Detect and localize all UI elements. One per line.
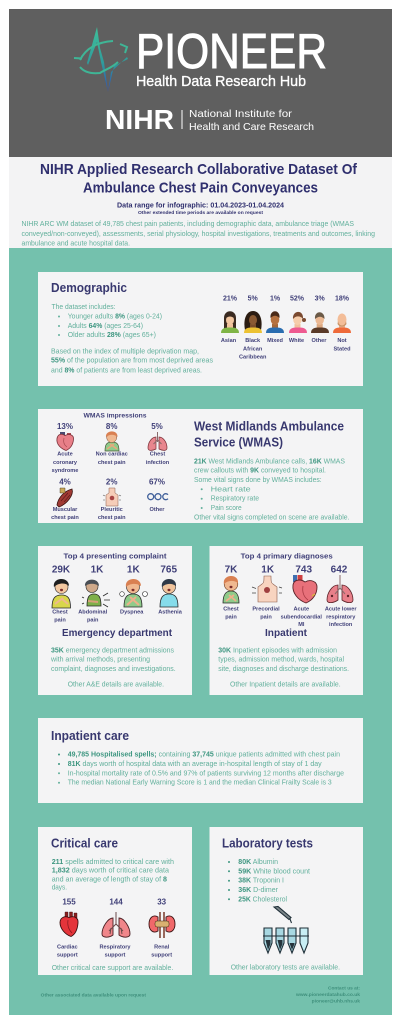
complaint: chest pain: Chest <box>52 609 68 615</box>
NIHR logo: NIHR <box>105 104 174 135</box>
heading: West Midlands Ambulance Service: Service (WMAS) <box>194 436 283 450</box>
support: cardiac: support <box>57 953 78 959</box>
diagnosis: chest pain: Chest <box>223 606 239 612</box>
ethnicity: Asian: 21% <box>223 296 238 303</box>
deprivation text: 55% of the population are from most deprived areas <box>51 356 213 365</box>
critical care text: 211 spells admitted to critical care with <box>52 857 174 866</box>
impression: pleuritic chest pain: chest pain <box>98 515 126 521</box>
ethnicity: Black African Caribbean: Caribbean <box>239 354 267 360</box>
intro text <box>22 219 375 248</box>
diagnosis: acute lower respiratory infection: 642 <box>331 564 348 575</box>
impression: pleuritic chest pain <box>98 478 126 521</box>
ethnicity: Other: Other <box>312 338 327 344</box>
impression: muscular chest pain: chest pain <box>51 515 79 521</box>
panel: demographic <box>38 272 363 386</box>
ethnicity: Not Stated: 18% <box>335 296 350 303</box>
diagnosis: acute subendocardial MI <box>281 564 322 628</box>
data range: Other extended time periods are available on request <box>138 210 264 215</box>
impression: non cardiac chest pain: Non cardiac <box>96 452 128 458</box>
inpatient body text: Other Inpatient details are available. <box>230 680 341 689</box>
impression: acute coronary syndrome <box>52 422 78 474</box>
title: Ambulance Chest Pain Conveyances <box>83 180 318 196</box>
ethnicity: Not Stated: Not <box>337 338 347 344</box>
ethnicity: White: White <box>289 338 304 344</box>
complaint: chest pain: pain <box>54 617 66 623</box>
support: renal: 33 <box>157 898 167 907</box>
diagnosis: acute subendocardial MI: subendocardial <box>281 614 322 620</box>
intro panel <box>9 157 392 248</box>
support: respiratory: support <box>105 953 126 959</box>
inpatient care bullets <box>58 750 344 787</box>
inpatient care bullets: 49,785 Hospitalised spells; containing 37,745 unique patients admitted with chest pain <box>68 750 340 759</box>
ethnicity: Other <box>311 296 329 344</box>
data range <box>117 202 284 215</box>
complaint: abdominal pain: pain <box>87 617 99 623</box>
lab test list <box>228 857 310 903</box>
inpatient care bullets: The median National Early Warning Score is 1 and the median Clinical Frailty Scale is 3 <box>68 778 332 787</box>
ethnicity: Black African Caribbean: African <box>243 346 263 352</box>
support: respiratory: Respiratory <box>99 945 131 951</box>
support: cardiac: 155 <box>62 898 76 907</box>
complaint: dyspnea: 1K <box>127 564 140 575</box>
ED body text: 35K emergency department admissions <box>51 645 174 654</box>
diagnosis: chest pain: pain <box>225 614 237 620</box>
ethnicity: White: 52% <box>290 296 305 303</box>
ethnicity: White <box>289 296 307 344</box>
age breakdown text <box>52 302 162 339</box>
complaint: chest pain <box>52 564 71 623</box>
lab test list: 80K Albumin <box>238 857 278 866</box>
inpatient body text: types, admission method, wards, hospital <box>218 655 344 664</box>
impression: other: 67% <box>149 478 165 487</box>
ED body text <box>50 645 176 689</box>
impression: chest infection: Chest <box>150 452 165 458</box>
NIHR logo: Health and Care Research <box>189 121 314 133</box>
ethnicity: Black African Caribbean <box>239 296 267 360</box>
complaint: abdominal pain <box>78 564 110 623</box>
impression: acute coronary syndrome: 13% <box>57 422 73 431</box>
diagnosis: acute lower respiratory infection: Acute lower <box>325 606 357 612</box>
panel: inpatient care <box>38 718 363 803</box>
impression: pleuritic chest pain: Pleuritic <box>101 507 123 513</box>
diagnosis: precordial pain: Precordial <box>252 606 280 612</box>
impression: acute coronary syndrome: coronary <box>53 460 78 466</box>
WMAS body text: Pain score <box>211 503 242 512</box>
impression: muscular chest pain <box>51 478 79 521</box>
age breakdown text: Older adults 28% (ages 65+) <box>68 330 156 339</box>
complaint: abdominal pain: 1K <box>91 564 104 575</box>
support: cardiac <box>57 898 78 959</box>
diagnosis: precordial pain: pain <box>260 614 272 620</box>
heading: inpatient care: Inpatient care <box>51 729 129 743</box>
support: respiratory: 144 <box>109 898 123 907</box>
ethnicity: Mixed <box>266 296 284 344</box>
diagnosis: acute subendocardial MI: Acute <box>294 606 309 612</box>
support: renal <box>149 898 175 959</box>
impression: non cardiac chest pain: chest pain <box>98 460 126 466</box>
inpatient care bullets: In-hospital mortality rate of 0.5% and 97% of patients surviving 12 months after discharge <box>68 768 344 777</box>
deprivation text: Based on the index of multiple deprivation map, <box>51 346 199 355</box>
critical care text <box>52 857 174 892</box>
critical care text: days. <box>52 883 67 892</box>
intro text: ambulance and acute hospital data. <box>22 238 130 248</box>
diagnosis: acute lower respiratory infection <box>325 564 357 628</box>
panel: WMAS <box>38 409 363 523</box>
diagnosis: chest pain: 7K <box>225 564 238 575</box>
diagnosis: precordial pain <box>252 564 282 620</box>
top 4 complaint heading: Top 4 presenting complaint <box>64 551 167 560</box>
WMAS body text: 21K West Midlands Ambulance calls, 16K WMAS <box>194 456 345 465</box>
support: renal: support <box>151 953 172 959</box>
hub subtitle: Health Data Research Hub <box>136 73 306 90</box>
diagnosis: precordial pain: 1K <box>261 564 275 575</box>
lab test list: 59K White blood count <box>238 866 310 875</box>
impression: other <box>148 478 168 513</box>
complaint: asthenia: Asthenia <box>158 609 183 615</box>
impression: acute coronary syndrome: syndrome <box>52 468 78 474</box>
data range: Data range for infographic: 01.04.2023-01.04.2024 <box>117 202 284 210</box>
WMAS body text: Some vital signs done by WMAS includes: <box>194 475 322 484</box>
complaint: abdominal pain: Abdominal <box>78 609 108 615</box>
intro text: conveyed/non-conveyed), assessments, serial physiology, hospital investigations, treatments and outcomes, linking <box>22 229 375 238</box>
impression: other: Other <box>150 507 165 513</box>
ED body text: complaint, diagnoses and investigations. <box>51 664 176 673</box>
ethnicity: Black African Caribbean: 5% <box>248 296 259 303</box>
deprivation text: and 8% of patients are from least deprived areas. <box>51 365 202 374</box>
PIONEER wordmark: PIONEER <box>136 25 327 79</box>
intro text: NIHR ARC WM dataset of 49,785 chest pain patients, including demographic data, ambulance triage (WMAS <box>22 219 354 228</box>
lab note: Other laboratory tests are available. <box>231 963 340 972</box>
header banner <box>9 9 392 157</box>
panel: inpatient <box>210 546 363 695</box>
impression: chest infection: infection <box>146 460 170 466</box>
diagnosis: acute lower respiratory infection: infection <box>329 622 353 628</box>
ethnicity: Not Stated <box>333 296 351 352</box>
age breakdown text: Adults 64% (ages 25-64) <box>68 321 143 330</box>
heading: critical care: Critical care <box>51 837 118 851</box>
contact details: pioneer@uhb.nhs.uk <box>312 998 361 1003</box>
inpatient body text: 30K Inpatient episodes with admission <box>218 645 337 654</box>
critical care text: and an average of length of stay of 8 <box>52 874 167 883</box>
heading: demographic: Demographic <box>51 281 127 295</box>
WMAS body text: Respiratory rate <box>211 494 259 503</box>
inpatient body text <box>218 645 349 689</box>
critical care text: 1,832 days worth of critical care data <box>52 866 170 875</box>
NIHR logo: National Institute for <box>189 108 293 120</box>
panel: laboratory tests <box>210 827 363 975</box>
diagnosis: acute subendocardial MI: 743 <box>295 564 312 575</box>
footer note: Other associated data available upon request <box>41 993 147 998</box>
impression: non cardiac chest pain <box>96 422 128 466</box>
complaint: asthenia: 765 <box>160 564 177 575</box>
complaint: dyspnea: Dyspnea <box>120 609 144 615</box>
heading: West Midlands Ambulance Service: West Midlands Ambulance <box>194 420 344 434</box>
ethnicity: Black African Caribbean: Black <box>245 338 261 344</box>
WMAS body text: Other vital signs completed on scene are available. <box>194 512 350 521</box>
panel: emergency department <box>38 546 192 695</box>
title <box>40 161 358 196</box>
impression: muscular chest pain: 4% <box>59 478 71 487</box>
diagnosis: acute subendocardial MI: MI <box>298 622 305 628</box>
contact details <box>295 985 361 1003</box>
support: renal: Renal <box>154 945 170 951</box>
complaint: dyspnea <box>120 564 148 615</box>
deprivation text <box>51 346 213 374</box>
complaint: chest pain: 29K <box>52 564 71 575</box>
WMAS body text <box>194 456 350 521</box>
ethnicity: Not Stated: Stated <box>333 346 351 352</box>
impression: pleuritic chest pain: 2% <box>106 478 117 487</box>
lab test list: 36K D-dimer <box>238 885 279 894</box>
icon: Pioneer logo <box>74 27 128 92</box>
diagnosis: chest pain <box>223 564 239 620</box>
inpatient care bullets: 81K days worth of hospital data with an average in-hospital length of stay of 1 day <box>68 759 322 768</box>
heading: emergency department: Emergency department <box>62 627 172 639</box>
impression: acute coronary syndrome: Acute <box>57 452 73 458</box>
diagnosis: acute lower respiratory infection: respiratory <box>326 614 356 620</box>
WMAS body text: crew callouts with 9K conveyed to hospital. <box>194 466 326 475</box>
age breakdown text: Younger adults 8% (ages 0-24) <box>68 312 162 321</box>
ethnicity: Other: 3% <box>315 296 326 303</box>
complaint: asthenia <box>158 564 183 615</box>
ED body text: with arrival methods, presenting <box>50 655 150 664</box>
WMAS impressions heading: WMAS impressions <box>84 413 147 420</box>
top 4 diagnoses heading: Top 4 primary diagnoses <box>241 551 333 560</box>
ethnicity: Mixed: Mixed <box>267 338 284 344</box>
impression: chest infection <box>146 422 170 466</box>
heading: West Midlands Ambulance Service <box>194 420 344 450</box>
ethnicity: Asian <box>221 296 239 344</box>
ethnicity: Mixed: 1% <box>270 296 281 303</box>
critical care note: Other critical care support are available. <box>52 963 173 972</box>
icon: pipette and test tubes <box>263 906 309 953</box>
title: NIHR Applied Research Collaborative Dataset Of <box>40 161 358 178</box>
heading: laboratory tests: Laboratory tests <box>222 836 313 850</box>
contact details: www.pioneerdatahub.co.uk <box>295 992 361 997</box>
NIHR logo <box>105 104 314 135</box>
WMAS body text: Heart rate <box>211 484 251 493</box>
impression: chest infection: 5% <box>151 422 163 431</box>
contact details: Contact us at: <box>328 985 361 990</box>
support: respiratory <box>99 898 131 959</box>
heading: inpatient: Inpatient <box>265 627 307 639</box>
inpatient body text: site, diagnoses and discharge destinations. <box>218 664 349 673</box>
panel: critical care <box>38 827 192 975</box>
age breakdown text: The dataset includes: <box>52 302 116 311</box>
ED body text: Other A&E details are available. <box>68 680 164 689</box>
lab test list: 38K Troponin I <box>238 876 284 885</box>
lab test list: 25K Cholesterol <box>238 894 287 903</box>
impression: muscular chest pain: Muscular <box>53 507 78 513</box>
impression: non cardiac chest pain: 8% <box>106 422 117 431</box>
ethnicity: Asian: Asian <box>221 338 237 344</box>
support: cardiac: Cardiac <box>57 945 78 951</box>
